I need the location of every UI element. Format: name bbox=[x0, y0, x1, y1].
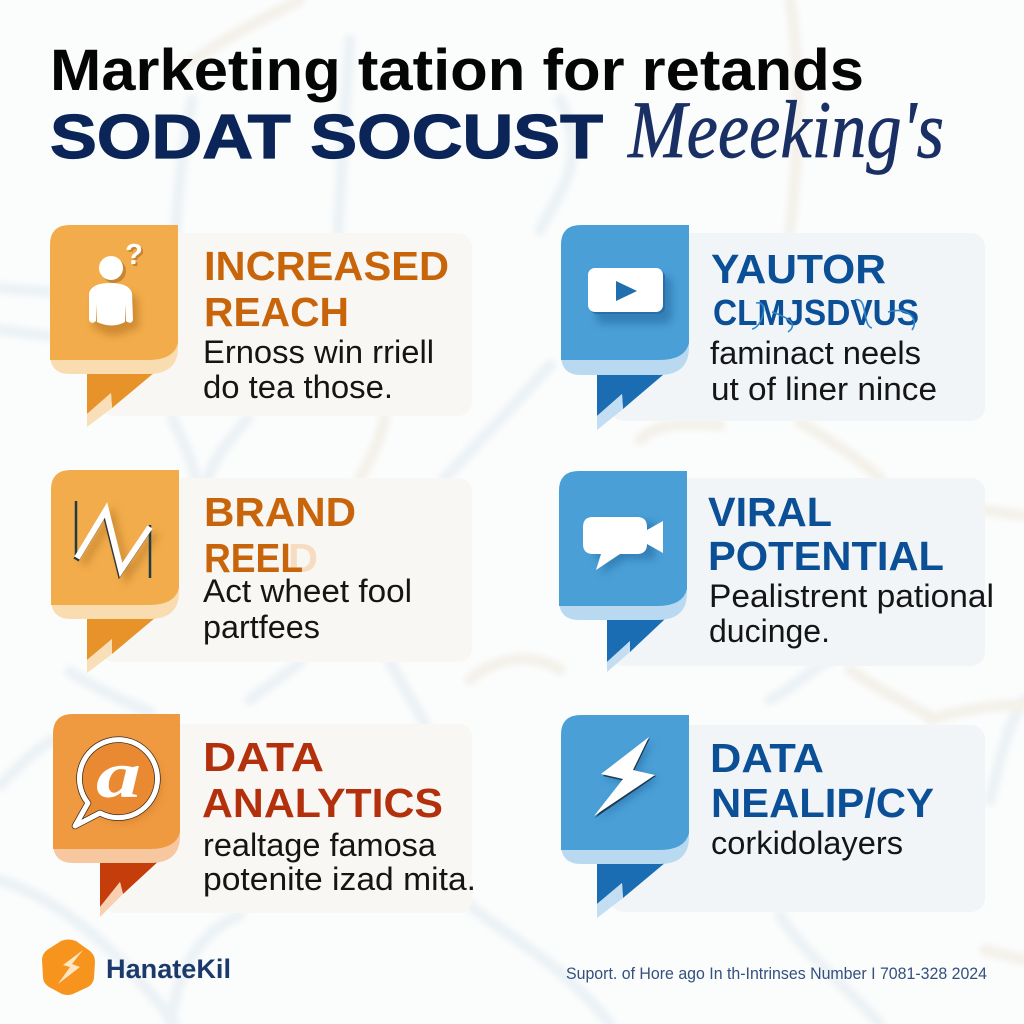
card: yautor clmjsdvus: CLMJSDVUS bbox=[713, 292, 919, 333]
title line two: SODAT SOCUST bbox=[50, 103, 603, 172]
icon: at sign speech bubble: a bbox=[96, 739, 141, 812]
heading: BRAND bbox=[204, 489, 356, 535]
card: increased reach: REACH bbox=[204, 289, 349, 335]
speech box bbox=[53, 714, 180, 917]
card: data analytics bbox=[53, 714, 476, 917]
heading: INCREASED bbox=[204, 243, 449, 289]
heading: VIRAL bbox=[708, 489, 832, 535]
card: brand reel: REEL bbox=[204, 535, 303, 581]
panel background bbox=[100, 478, 472, 662]
body text: Act wheet fool bbox=[203, 573, 412, 609]
logo bbox=[42, 940, 231, 995]
speech box bbox=[51, 470, 179, 673]
footer note: Suport. of Hore ago In th-Intrinses Number I 7081-328 2024 bbox=[566, 964, 987, 983]
card: increased reach bbox=[50, 225, 472, 427]
card: brand reel: D bbox=[288, 535, 318, 581]
icon: person with question mark: ? bbox=[127, 241, 145, 273]
panel background bbox=[610, 725, 985, 912]
panel background bbox=[610, 478, 985, 666]
card: viral potential: ducinge. bbox=[709, 613, 830, 649]
panel background bbox=[105, 724, 472, 913]
panel background bbox=[100, 233, 472, 416]
speech box bbox=[50, 225, 178, 427]
card: brand reel: partfees bbox=[203, 609, 320, 645]
heading: DATA bbox=[710, 735, 824, 781]
card: data analytics: ANALYTICS bbox=[202, 780, 443, 826]
scribble over heading bbox=[752, 300, 914, 332]
icon: person with question mark bbox=[89, 239, 145, 336]
card: data nealip/cy: NEALIP/CY bbox=[711, 780, 934, 826]
speech box bbox=[561, 225, 689, 430]
icon: lightning bolt bbox=[594, 737, 659, 820]
card: data nealip/cy bbox=[561, 715, 985, 918]
card: yautor clmjsdvus: ut of liner nince bbox=[711, 371, 937, 407]
icon: zigzag line bbox=[76, 501, 156, 578]
brand name: HanateKil bbox=[106, 954, 231, 984]
card: viral potential bbox=[559, 471, 994, 672]
icon: video player bbox=[588, 268, 672, 324]
title script word: Meeeking's bbox=[627, 84, 944, 175]
heading: DATA bbox=[203, 734, 324, 780]
body text: Pealistrent pational bbox=[709, 578, 994, 614]
title line one: Marketing tation for retands bbox=[50, 38, 864, 103]
card: brand reel bbox=[51, 470, 472, 673]
icon: video chat bubble bbox=[583, 517, 663, 575]
icon: orange hexagon with bolt bbox=[42, 940, 95, 995]
heading: YAUTOR bbox=[711, 246, 886, 292]
body text: faminact neels bbox=[710, 335, 921, 371]
speech box bbox=[559, 471, 687, 672]
card: viral potential: POTENTIAL bbox=[708, 533, 944, 579]
title bbox=[50, 38, 944, 175]
icon: at sign speech bubble bbox=[75, 739, 161, 826]
body text: Ernoss win rriell bbox=[203, 334, 434, 370]
card: increased reach: do tea those. bbox=[203, 369, 393, 405]
card: yautor clmjsdvus bbox=[561, 225, 985, 430]
panel background bbox=[610, 233, 985, 421]
icon: person with question mark: ? bbox=[125, 239, 143, 271]
card: data analytics: potenite izad mita. bbox=[203, 861, 476, 897]
speech box bbox=[561, 715, 689, 918]
body text: corkidolayers bbox=[711, 825, 903, 861]
body text: realtage famosa bbox=[203, 827, 436, 863]
